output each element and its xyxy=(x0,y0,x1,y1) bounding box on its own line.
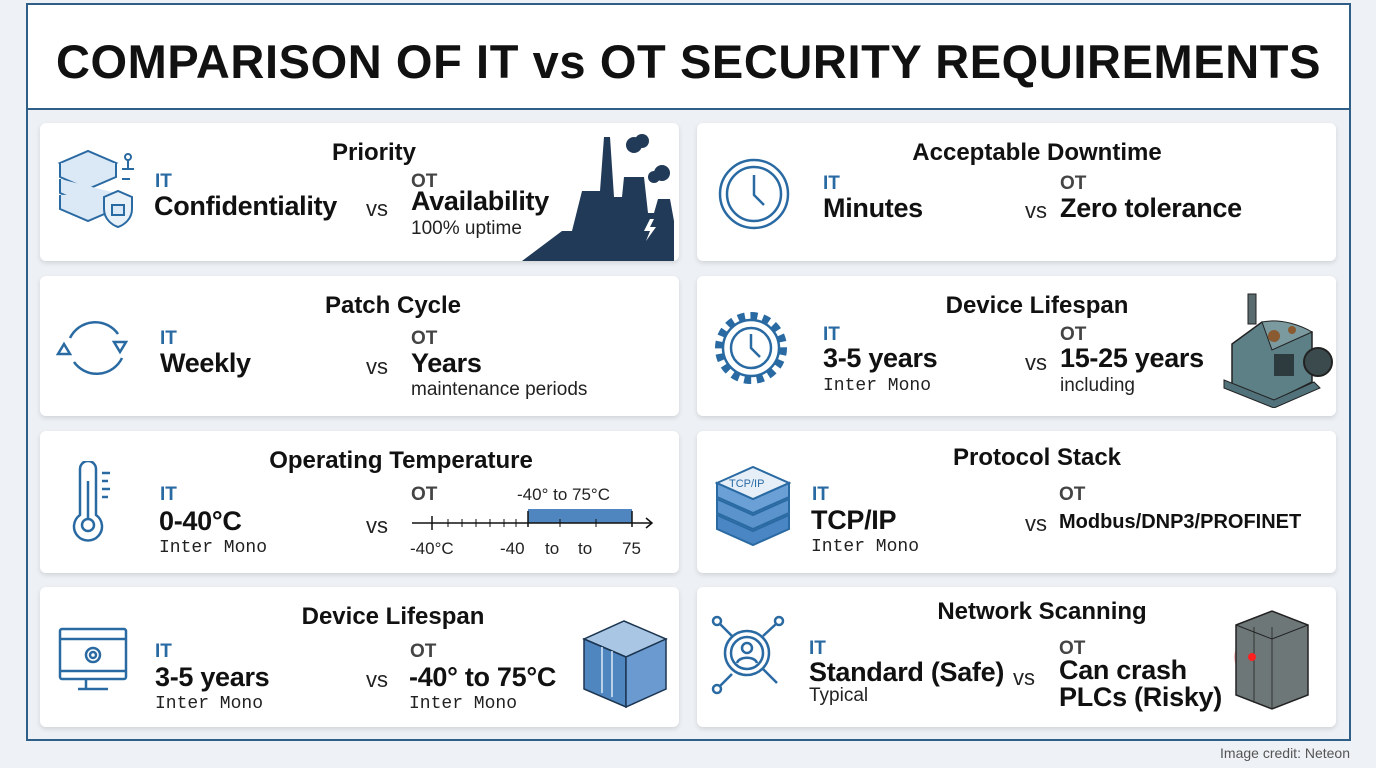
icon: server shield xyxy=(58,150,134,228)
panel: device lifespan left: vs xyxy=(366,667,388,692)
panel: protocol stack: vs xyxy=(1025,511,1047,536)
panel: network scanning: Network Scanning xyxy=(937,598,1147,625)
panel: device lifespan left xyxy=(40,587,679,727)
icon: stack xyxy=(715,466,791,546)
OT: OT xyxy=(411,171,437,192)
panel: operating temperature xyxy=(40,431,679,573)
icon: PLC xyxy=(582,620,668,708)
icon: PLC alert xyxy=(1234,610,1309,710)
panel: patch cycle: IT xyxy=(160,328,177,349)
heading: Priority xyxy=(332,139,416,166)
panel: device lifespan left: 3-5 years xyxy=(155,662,269,692)
chart: temperature range: -40°C xyxy=(410,539,454,558)
panel: priority: Confidentiality xyxy=(154,191,337,221)
chart: temperature range: -40° to 75°C xyxy=(517,485,610,504)
panel: downtime xyxy=(697,123,1336,261)
panel: protocol stack: IT xyxy=(812,484,829,505)
panel: device lifespan right: 3-5 years xyxy=(823,343,937,373)
panel: device lifespan right: 15-25 years xyxy=(1060,343,1204,373)
panel: operating temperature: Inter Mono xyxy=(159,538,267,558)
panel: device lifespan left: -40° to 75°C xyxy=(409,662,556,692)
panel: network scanning: Typical xyxy=(809,685,868,706)
panel: protocol stack xyxy=(697,431,1336,573)
chart: temperature range: to xyxy=(578,539,592,558)
panel: network scanning xyxy=(697,587,1336,727)
IT: IT xyxy=(155,171,172,192)
panel: device lifespan right: IT xyxy=(823,324,840,345)
panel: operating temperature: OT xyxy=(411,484,437,505)
panel: patch cycle: OT xyxy=(411,328,437,349)
panel: device lifespan right: vs xyxy=(1025,350,1047,375)
panel: network scanning: Standard (Safe) xyxy=(809,657,1004,687)
panel: device lifespan right: Inter Mono xyxy=(823,376,931,396)
panel: device lifespan left: Inter Mono xyxy=(155,694,263,714)
title: COMPARISON OF IT vs OT SECURITY REQUIREMENTS xyxy=(56,35,1321,88)
panel: network scanning: Can crash xyxy=(1059,655,1187,685)
chart: temperature range: 75 xyxy=(622,539,641,558)
panel: downtime: vs xyxy=(1025,198,1047,223)
panel: protocol stack: Modbus/DNP3/PROFINET xyxy=(1059,511,1301,533)
panel: device lifespan right xyxy=(697,276,1336,416)
panel: patch cycle: vs xyxy=(366,354,388,379)
panel: operating temperature: 0-40°C xyxy=(159,506,242,536)
icon: clock xyxy=(718,158,790,230)
panel: priority: Availability xyxy=(411,186,549,216)
panel: protocol stack: OT xyxy=(1059,484,1085,505)
icon: stack: TCP/IP xyxy=(729,478,764,490)
panel: downtime: Minutes xyxy=(823,193,923,223)
panel: device lifespan right: OT xyxy=(1060,324,1086,345)
panel: protocol stack: TCP/IP xyxy=(811,505,896,535)
panel: device lifespan right: including xyxy=(1060,375,1135,396)
panel: device lifespan left: IT xyxy=(155,641,172,662)
icon: thermometer xyxy=(72,461,110,542)
icon: rusty machine xyxy=(1224,294,1333,408)
panel: patch cycle: Weekly xyxy=(160,348,251,378)
title xyxy=(28,5,1349,110)
icon: cycle arrows xyxy=(56,321,128,375)
panel: protocol stack: Inter Mono xyxy=(811,537,919,557)
panel: patch cycle: Years xyxy=(411,348,482,378)
panel: operating temperature: IT xyxy=(160,484,177,505)
icon: gear clock xyxy=(715,312,787,384)
panel: network scanning: vs xyxy=(1013,665,1035,690)
icon: factory xyxy=(522,134,674,261)
chart: temperature range: -40 xyxy=(500,539,525,558)
panel: protocol stack: Protocol Stack xyxy=(953,444,1121,471)
panel: device lifespan left: Device Lifespan xyxy=(302,603,484,630)
panel: downtime: IT xyxy=(823,173,840,194)
panel: patch cycle: Patch Cycle xyxy=(325,292,461,319)
panel: device lifespan left: Inter Mono xyxy=(409,694,517,714)
panel: patch cycle xyxy=(40,276,679,416)
panel: network scanning: OT xyxy=(1059,638,1085,659)
icon: monitor gear xyxy=(58,628,128,690)
panel: priority xyxy=(40,123,679,261)
chart: temperature range xyxy=(410,485,654,558)
panel: network scanning: IT xyxy=(809,638,826,659)
credit: Image credit: Neteon xyxy=(1220,745,1350,761)
panel: operating temperature: Operating Temperature xyxy=(269,447,533,474)
panel: operating temperature: vs xyxy=(366,513,388,538)
panel: downtime: Zero tolerance xyxy=(1060,193,1242,223)
panel: device lifespan left: OT xyxy=(410,641,436,662)
heading: Acceptable Downtime xyxy=(912,139,1162,166)
panel: priority: 100% uptime xyxy=(411,218,522,239)
icon: search user xyxy=(712,616,784,694)
chart: temperature range: to xyxy=(545,539,559,558)
vs: vs xyxy=(366,196,388,221)
panel: patch cycle: maintenance periods xyxy=(411,379,587,400)
panel: device lifespan right: Device Lifespan xyxy=(946,292,1128,319)
panel: downtime: OT xyxy=(1060,173,1086,194)
panel: network scanning: PLCs (Risky) xyxy=(1059,682,1222,712)
